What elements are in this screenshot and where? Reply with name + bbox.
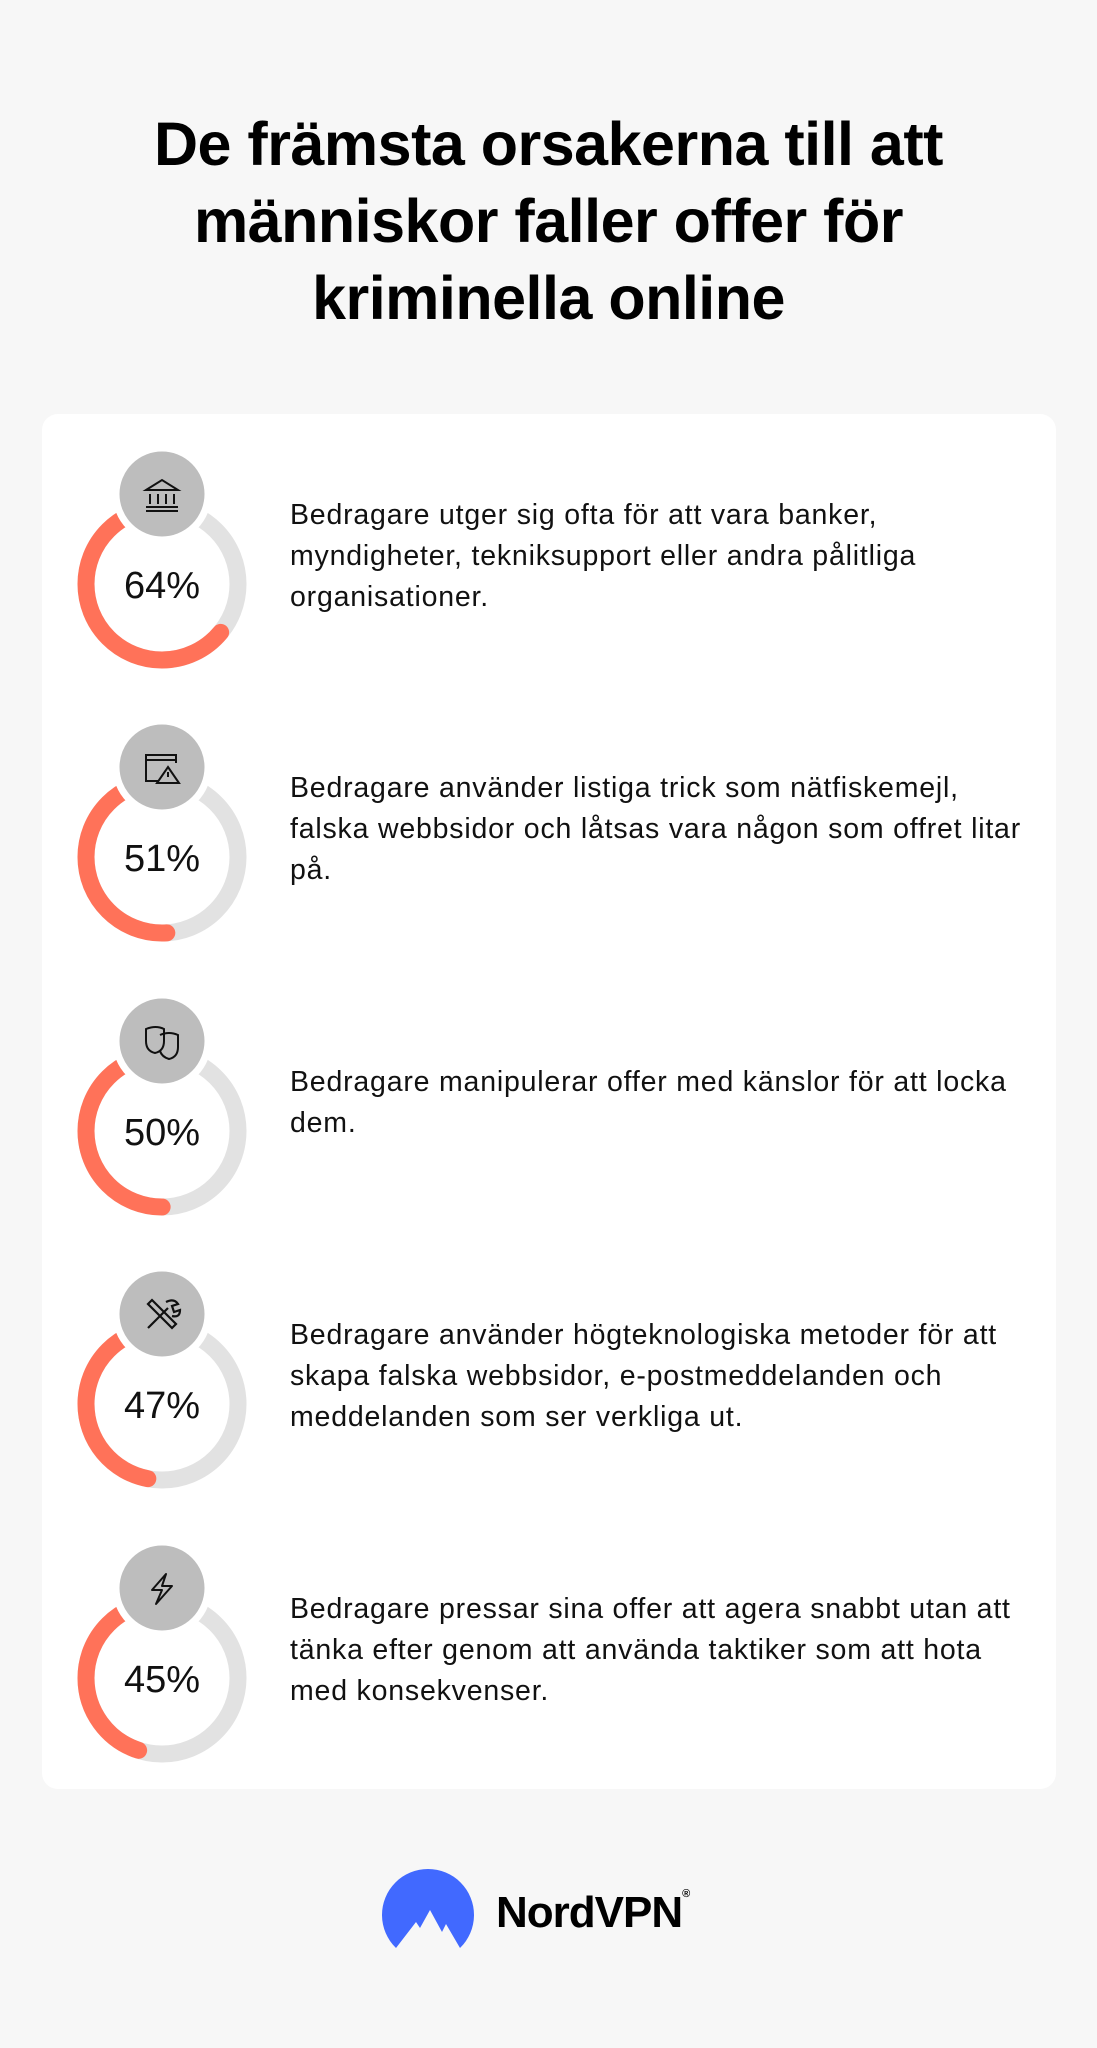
- text: urgency: Bedragare pressar sina offer att agera snabbt utan att: [290, 1593, 1011, 1625]
- text: phishing: falska webbsidor och låtsas vara någon som offret litar: [290, 813, 1021, 845]
- chart: ring 64%: [78, 452, 246, 668]
- chart: ring 51%: 51%: [124, 838, 200, 880]
- text: NordVPN: NordVPN®: [496, 1888, 689, 1937]
- chart: ring 51%: [78, 724, 246, 942]
- chart: ring 47%: [78, 1272, 246, 1488]
- text: banks: [290, 499, 916, 613]
- title: [154, 110, 943, 332]
- text: urgency: tänka efter genom att använda taktiker som att hota: [290, 1634, 982, 1666]
- item: 64%: [78, 452, 916, 668]
- chart: ring 50%: [78, 998, 246, 1216]
- title: människor faller offer för: [194, 187, 903, 255]
- chart: ring 50%: 50%: [124, 1112, 200, 1154]
- text: emotions: [290, 1066, 1007, 1139]
- item: 47%: [78, 1272, 997, 1488]
- icon: NordVPN mountain: [382, 1869, 474, 1948]
- text: banks: myndigheter, tekniksupport eller andra pålitliga: [290, 540, 916, 572]
- chart: ring 45%: [78, 1546, 246, 1762]
- title: De främsta orsakerna till att: [154, 110, 943, 178]
- text: high tech: Bedragare använder högteknologiska metoder för att: [290, 1319, 997, 1351]
- text: high tech: [290, 1319, 997, 1433]
- chart: ring 47%: 47%: [124, 1385, 200, 1427]
- title: kriminella online: [312, 264, 785, 332]
- text: phishing: på.: [290, 854, 332, 886]
- text: phishing: Bedragare använder listiga trick som nätfiskemejl,: [290, 772, 959, 804]
- text: banks: organisationer.: [290, 581, 489, 613]
- chart: ring 45%: 45%: [124, 1659, 200, 1701]
- item: 50%: [78, 998, 1007, 1216]
- text: high tech: meddelanden som ser verkliga ut.: [290, 1401, 743, 1433]
- text: urgency: med konsekvenser.: [290, 1675, 549, 1707]
- text: high tech: skapa falska webbsidor, e-postmeddelanden och: [290, 1360, 942, 1392]
- item: 45%: [78, 1546, 1011, 1762]
- item: 51%: [78, 724, 1021, 942]
- panel: statistics card: [42, 414, 1056, 1789]
- chart: ring 64%: 64%: [124, 565, 200, 607]
- text: urgency: [290, 1593, 1011, 1707]
- text: phishing: [290, 772, 1021, 886]
- logo: NordVPN: [382, 1869, 690, 1948]
- text: emotions: dem.: [290, 1107, 357, 1139]
- text: emotions: Bedragare manipulerar offer med känslor för att locka: [290, 1066, 1007, 1098]
- text: banks: Bedragare utger sig ofta för att vara banker,: [290, 499, 877, 531]
